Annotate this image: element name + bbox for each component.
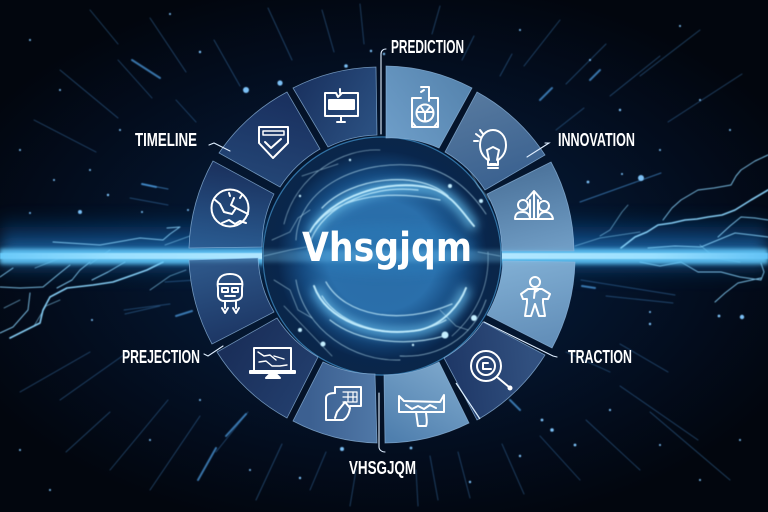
energy beam (0, 249, 768, 264)
background: glow band behind the energy beam (0, 214, 768, 282)
segment: Traction (484, 261, 575, 357)
center glow (302, 224, 474, 276)
icon: server panel (325, 89, 358, 122)
edge highlight (456, 383, 480, 419)
segment: Innovation (445, 92, 549, 190)
icon: tablet and hand (326, 387, 361, 420)
icon: magnifier with at sign (471, 351, 512, 390)
segment: Prejection (189, 258, 274, 356)
segment: lower left (293, 362, 377, 443)
center disc with swirl (262, 136, 502, 376)
icon: light bulb (474, 130, 506, 168)
icon: globe map (212, 190, 248, 226)
icon: prediction gauge (412, 87, 438, 127)
icon: robot head (218, 274, 242, 313)
segment: lower right (384, 362, 469, 443)
connector: Timeline (209, 143, 230, 151)
label: Prejection: PREJECTION (122, 347, 200, 367)
label: Prediction: PREDICTION (391, 37, 464, 57)
label: Vhsgjqm: VHSGJQM (349, 458, 416, 478)
segment: Timeline (209, 92, 320, 187)
segment: globe (189, 161, 274, 248)
swirl energy rings (264, 150, 500, 360)
connector: Prejection (204, 346, 223, 356)
segment: Prediction (386, 66, 472, 148)
segment: people and arrow (487, 162, 574, 251)
title: Vhsgjqm: Vhsgjqm (302, 225, 472, 271)
swirl halo (312, 187, 474, 332)
label: Timeline: TIMELINE (135, 130, 197, 150)
segment: monitor (217, 318, 318, 418)
icon: person standing (521, 277, 550, 316)
beam glow passing over the ring gaps (0, 250, 768, 262)
segment: top left (293, 67, 377, 147)
connector: Innovation (527, 143, 549, 157)
icon: shield check (259, 127, 288, 158)
background: lightning arcs (0, 155, 768, 338)
connector: Vhsgjqm (379, 393, 385, 452)
icon: banner with drip (399, 395, 444, 426)
label: Traction: TRACTION (568, 347, 632, 367)
connector: Traction (484, 322, 557, 357)
icon: team with growth arrow (515, 191, 553, 219)
disc sparkle nodes (298, 159, 483, 346)
segment: search (444, 322, 545, 420)
icon: laptop with chart (250, 348, 295, 378)
connector: Prediction (381, 49, 386, 134)
label: Innovation: INNOVATION (558, 130, 635, 150)
